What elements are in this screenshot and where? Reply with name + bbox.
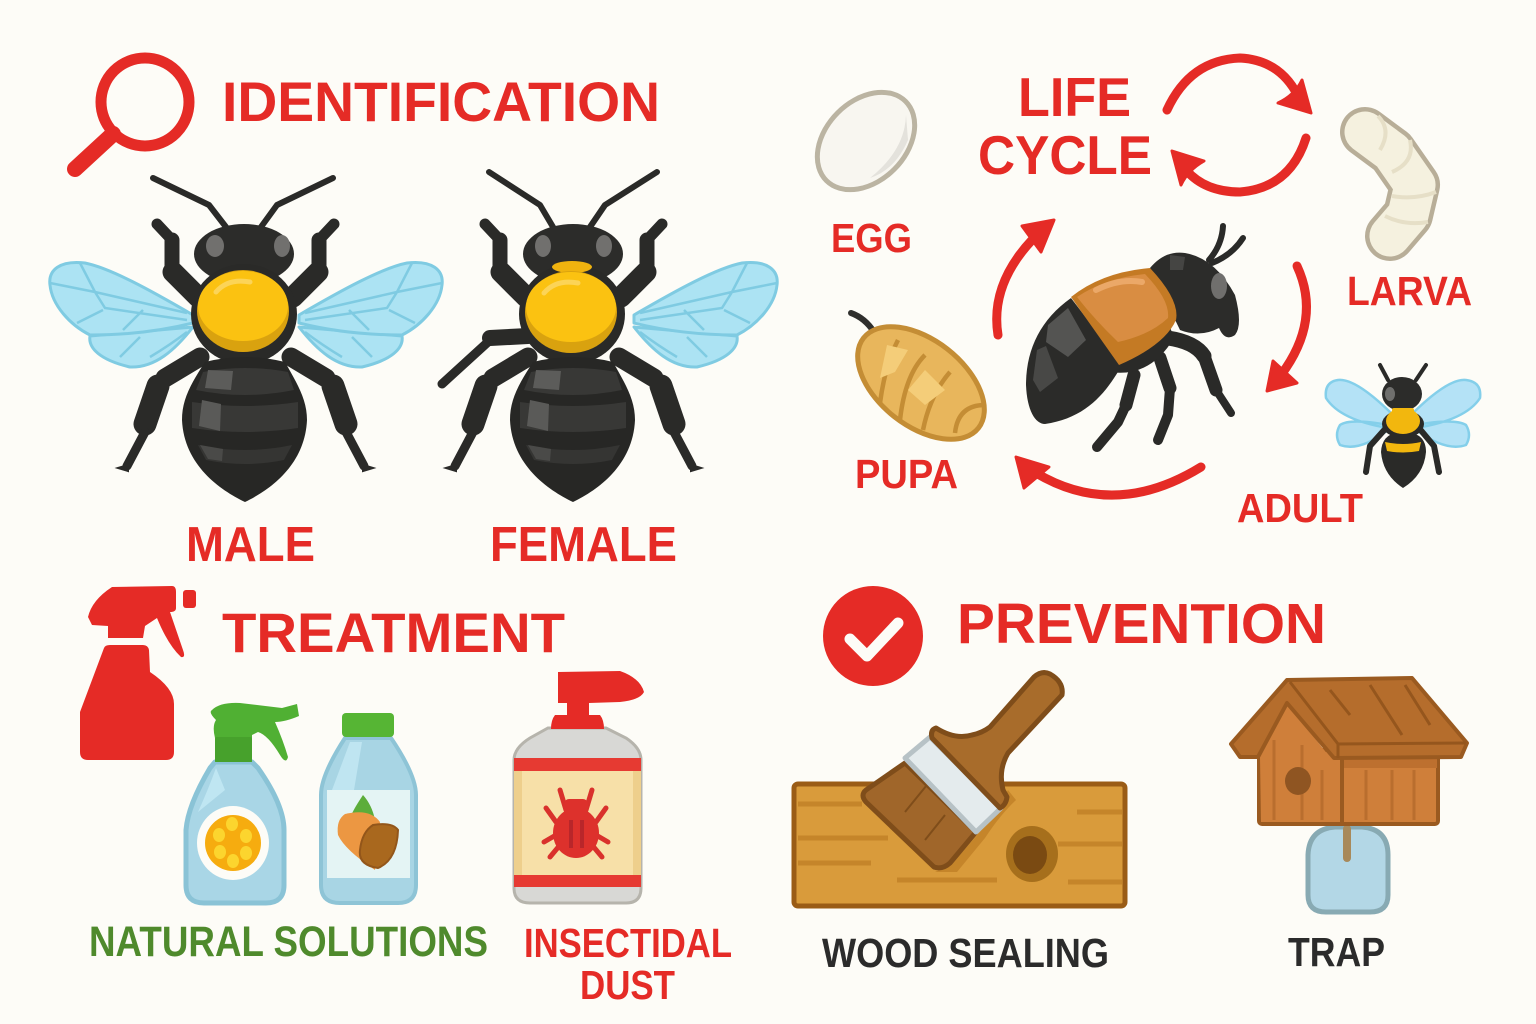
heading: identification: IDENTIFICATION <box>222 70 660 133</box>
illustration: larva <box>1365 116 1436 236</box>
label: natural solutions: NATURAL SOLUTIONS <box>89 918 488 966</box>
heading: life cycle: LIFE <box>1018 66 1131 128</box>
label: larva: LARVA <box>1347 268 1472 314</box>
panel: prevention <box>794 586 1467 976</box>
label: adult: ADULT <box>1237 485 1363 531</box>
icon: magnifying glass <box>75 58 189 169</box>
heading: life cycle: CYCLE <box>978 124 1152 186</box>
label: insecticidal dust <box>524 920 732 1008</box>
panel: identification <box>50 58 777 572</box>
illustration: wood plank with paintbrush <box>794 673 1125 906</box>
icon: cycle arrows <box>1167 58 1311 192</box>
label: insecticidal dust: DUST <box>580 962 675 1008</box>
illustration: female bee <box>442 172 777 502</box>
heading: life cycle <box>978 66 1152 186</box>
illustration: green spray bottle with citrus <box>186 703 299 903</box>
illustration: small adult bee <box>1326 365 1480 488</box>
label: female: FEMALE <box>490 518 677 572</box>
illustration: male bee <box>50 178 442 502</box>
illustration: egg <box>798 73 934 209</box>
icon: red spray bottle <box>80 586 196 760</box>
heading: prevention: PREVENTION <box>957 592 1326 656</box>
label: trap: TRAP <box>1288 929 1385 975</box>
arrow: pupa to egg <box>997 220 1054 335</box>
label: wood sealing: WOOD SEALING <box>822 930 1109 976</box>
panel: life cycle <box>798 58 1480 531</box>
illustration: carpenter bee trap <box>1231 678 1467 912</box>
illustration: bottle with almond oil <box>321 713 416 903</box>
icon: check badge <box>823 586 923 686</box>
arrow: larva to adult <box>1267 266 1306 391</box>
panel: treatment <box>80 586 732 1008</box>
illustration: insecticidal dust bottle <box>514 671 644 903</box>
label: male: MALE <box>186 518 315 572</box>
heading: treatment: TREATMENT <box>222 601 565 664</box>
label: egg: EGG <box>831 215 912 261</box>
label: insecticidal dust: INSECTIDAL <box>524 920 732 966</box>
illustration: large side-view bee <box>1026 226 1243 447</box>
illustration: pupa <box>837 304 1005 462</box>
arrow: adult to pupa <box>1016 457 1201 495</box>
label: pupa: PUPA <box>855 451 958 497</box>
